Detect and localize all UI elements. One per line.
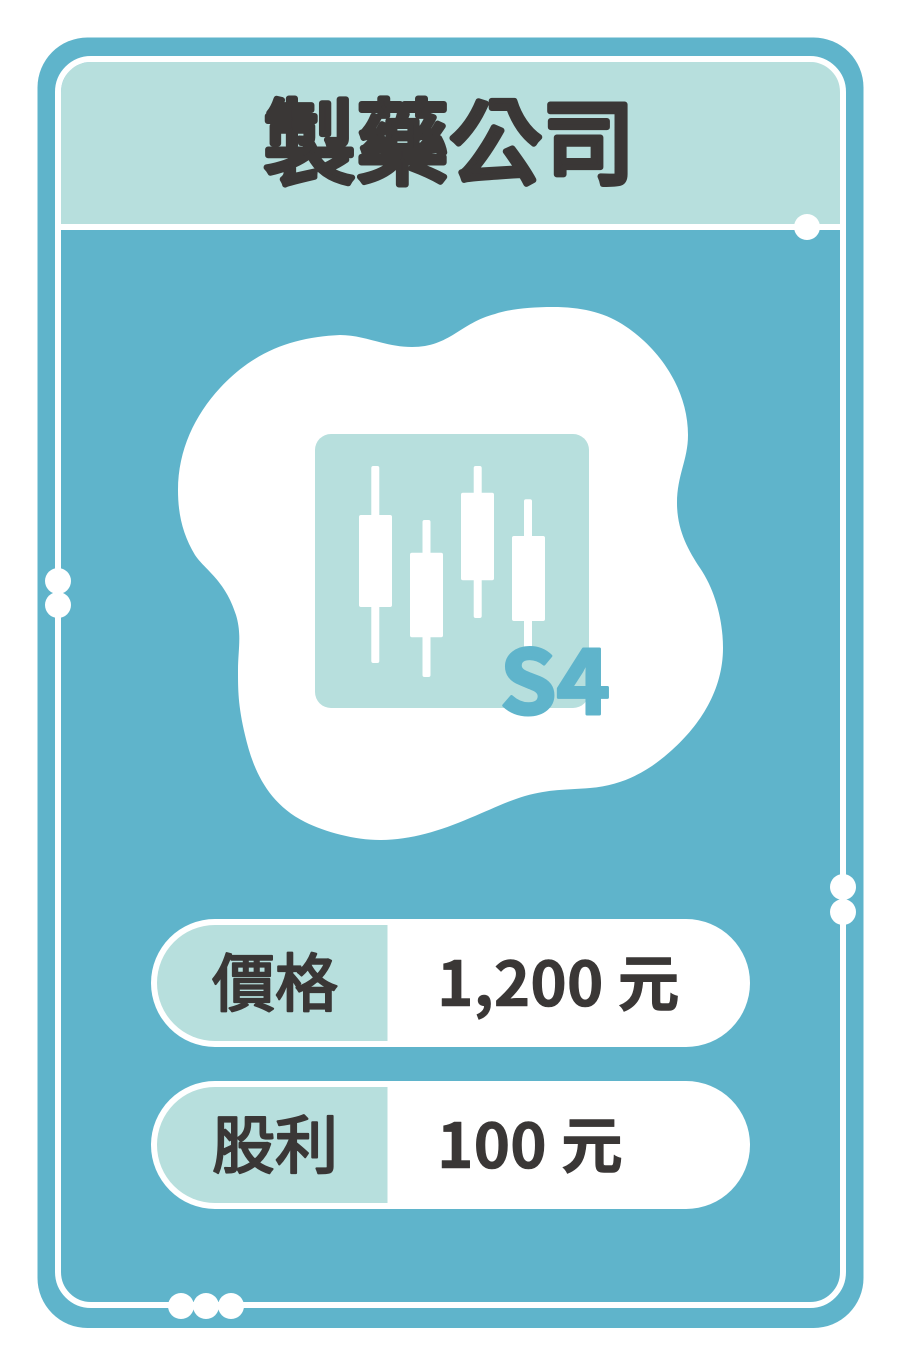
price value: 1,200 元	[437, 934, 680, 1024]
header dot	[794, 214, 820, 240]
price label: 價格	[212, 934, 338, 1025]
dividend row	[151, 1081, 750, 1209]
S4 label: S4	[500, 613, 610, 740]
white blob	[178, 307, 723, 840]
candle 2	[410, 520, 443, 677]
dividend label: 股利	[212, 1096, 338, 1187]
candle 1	[359, 466, 392, 663]
inner white frame	[58, 59, 843, 1305]
title: 製藥公司	[263, 69, 635, 204]
icon: candlestick chart	[315, 434, 610, 740]
right frame dots	[830, 874, 856, 925]
dividend value: 100 元	[437, 1096, 623, 1186]
header panel	[58, 62, 843, 230]
price row	[151, 919, 750, 1047]
candle 4	[512, 499, 545, 659]
candle 3	[461, 466, 494, 618]
left frame dots	[45, 568, 71, 618]
dividend label background	[157, 1087, 388, 1203]
price label background	[157, 925, 388, 1041]
bottom frame dots	[168, 1293, 244, 1319]
